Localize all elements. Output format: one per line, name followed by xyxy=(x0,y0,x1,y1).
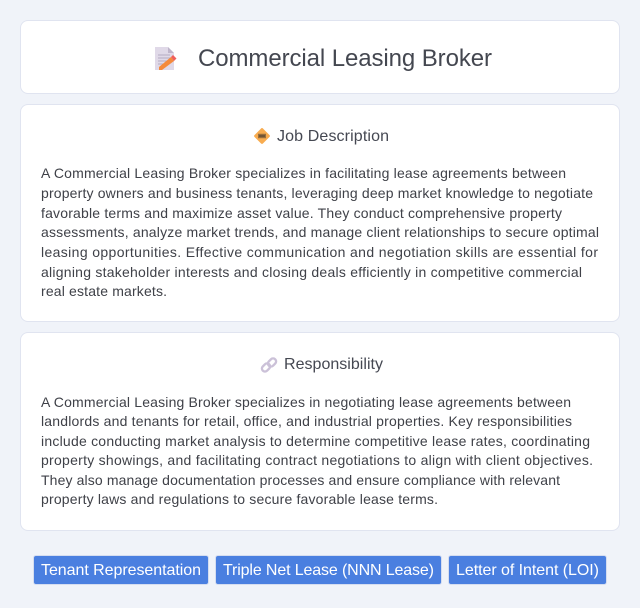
text block: responsibility: property laws and regulations to secure favorable lease terms. xyxy=(41,491,438,507)
tag: tenant representation: Tenant Representation xyxy=(41,562,201,579)
text block: job description: favorable terms and maximize asset value. They conduct comprehensive property xyxy=(41,205,562,221)
panel: job description xyxy=(20,104,620,322)
tag: triple net lease xyxy=(215,555,442,585)
text block: responsibility: landlords and tenants for retail, office, and industrial properties. Key responsibilities xyxy=(41,413,572,429)
heading: job description: Job Description xyxy=(277,128,389,145)
text block: responsibility: include conducting market analysis to determine competitive lease rates, coordinating xyxy=(41,433,590,449)
text block: job description: property owners and business tenants, leveraging deep market knowledge to negotiate xyxy=(41,185,593,201)
text block: job description xyxy=(41,165,599,299)
text block: responsibility: property showings, and facilitating contract negotiations to align with client objectives. xyxy=(41,452,593,468)
title: Commercial Leasing Broker xyxy=(198,45,492,72)
panel: title card xyxy=(20,20,620,94)
text block: job description: assessments, analyze market trends, and manage client relationships to secure optimal xyxy=(41,224,599,240)
icon: orange diamond sign xyxy=(254,128,270,144)
text block: job description: leasing opportunities. Effective communication and negotiation skills are essential for xyxy=(41,244,598,260)
text block: job description: aligning stakeholder interests and closing deals efficiently in competitive commercial xyxy=(41,264,582,280)
text block: responsibility xyxy=(41,394,593,507)
text block: responsibility: A Commercial Leasing Broker specializes in negotiating lease agreements between xyxy=(41,394,571,410)
text block: job description: A Commercial Leasing Broker specializes in facilitating lease agreements between xyxy=(41,165,566,181)
icon: chain link xyxy=(260,357,278,373)
tag: letter of intent xyxy=(448,555,607,585)
text block: responsibility: They also manage documentation processes and ensure compliance with relevant xyxy=(41,472,560,488)
panel: responsibility xyxy=(20,332,620,531)
icon: document with pencil xyxy=(155,47,176,70)
tag: tenant representation xyxy=(33,555,209,585)
tag: letter of intent: Letter of Intent (LOI) xyxy=(456,562,599,579)
heading: responsibility: Responsibility xyxy=(284,356,383,373)
tag: triple net lease: Triple Net Lease (NNN Lease) xyxy=(223,562,434,579)
text block: job description: real estate markets. xyxy=(41,283,167,299)
